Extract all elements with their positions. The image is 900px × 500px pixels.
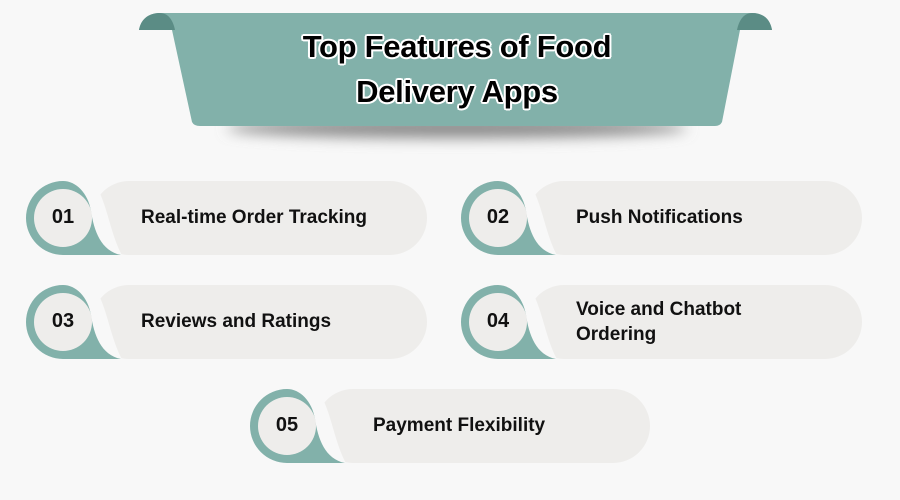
item 04: 04 <box>487 310 509 332</box>
label 03: Reviews and Ratings <box>141 311 331 332</box>
item 02: 02 <box>487 206 509 228</box>
label 02: Push Notifications <box>576 207 743 228</box>
item 05: 05 <box>276 414 298 436</box>
label 04: Ordering <box>576 324 656 345</box>
item 01: 01 <box>52 206 74 228</box>
item shapes <box>26 181 862 463</box>
label 05: Payment Flexibility <box>373 415 545 436</box>
item 03: 03 <box>52 310 74 332</box>
title <box>301 29 612 110</box>
label 01: Real-time Order Tracking <box>141 207 367 228</box>
title: Delivery Apps <box>356 74 558 109</box>
label 04: Voice and Chatbot <box>576 299 741 320</box>
label 04 <box>576 299 742 345</box>
banner <box>139 13 772 138</box>
title: Top Features of Food <box>303 29 611 64</box>
